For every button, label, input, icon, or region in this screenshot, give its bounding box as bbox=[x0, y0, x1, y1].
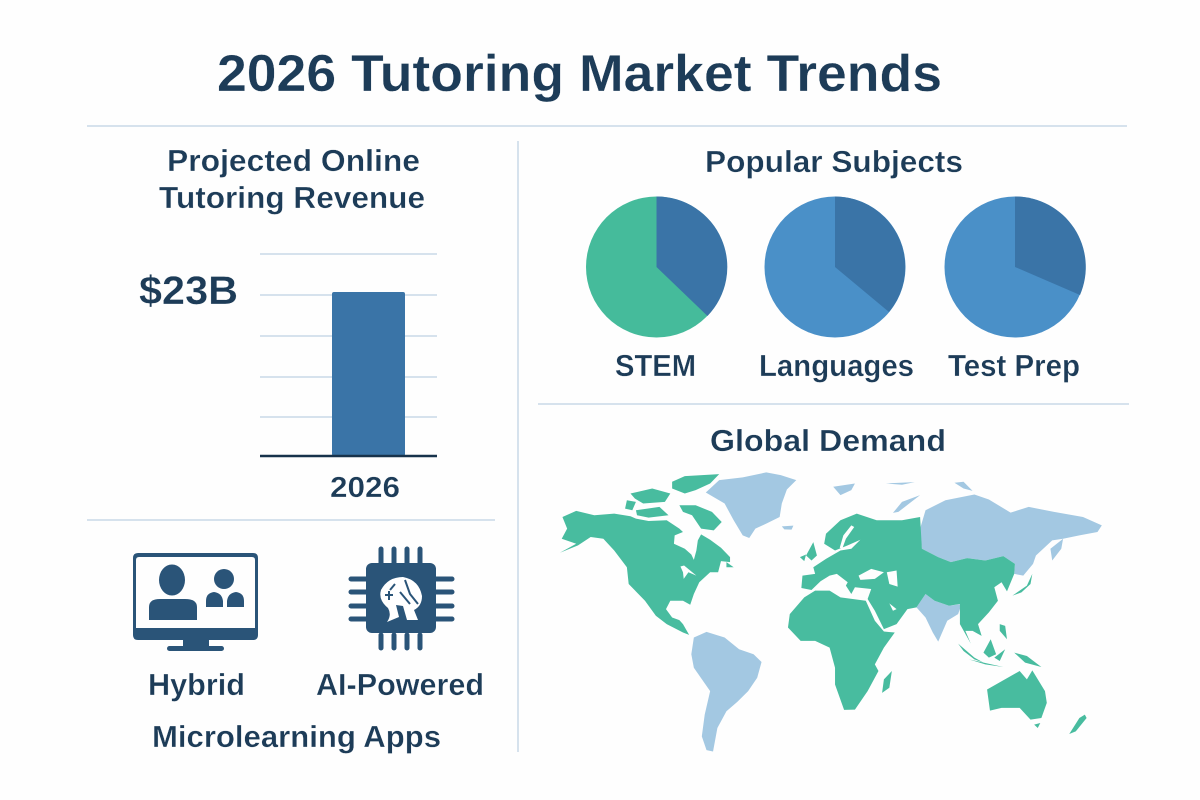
panel: popular subjects bbox=[586, 144, 1086, 383]
icon: hybrid monitor bbox=[133, 553, 258, 651]
label: Test Prep: Test Prep bbox=[948, 348, 1080, 383]
heading: revenue bbox=[159, 143, 425, 215]
label: AI-Powered: AI-Powered bbox=[316, 667, 484, 702]
title: 2026 Tutoring Market Trends bbox=[217, 45, 942, 103]
icon: AI chip bbox=[351, 549, 452, 648]
panel: global demand bbox=[560, 423, 1102, 751]
pie: STEM bbox=[586, 196, 727, 338]
world map bbox=[560, 472, 1102, 751]
label: Microlearning Apps: Microlearning Apps bbox=[152, 719, 441, 754]
regions: low demand bbox=[691, 472, 1102, 751]
pie: Test Prep bbox=[944, 196, 1086, 338]
bar chart: 2026 bbox=[330, 472, 400, 504]
label: STEM: STEM bbox=[615, 348, 696, 383]
heading: global demand: Global Demand bbox=[710, 423, 946, 458]
heading: revenue: Tutoring Revenue bbox=[159, 180, 425, 215]
pie: Languages bbox=[764, 196, 906, 338]
value label: $23B bbox=[139, 269, 238, 313]
label: Languages: Languages bbox=[759, 348, 914, 383]
panel: delivery trends bbox=[133, 549, 484, 754]
water features bbox=[680, 525, 898, 611]
heading: popular subjects: Popular Subjects bbox=[705, 144, 963, 179]
bar chart bbox=[260, 254, 437, 504]
panel: projected online tutoring revenue bbox=[139, 143, 437, 504]
label: Hybrid: Hybrid bbox=[148, 667, 245, 702]
heading: revenue: Projected Online bbox=[167, 143, 420, 178]
regions: high demand bbox=[560, 474, 1087, 734]
